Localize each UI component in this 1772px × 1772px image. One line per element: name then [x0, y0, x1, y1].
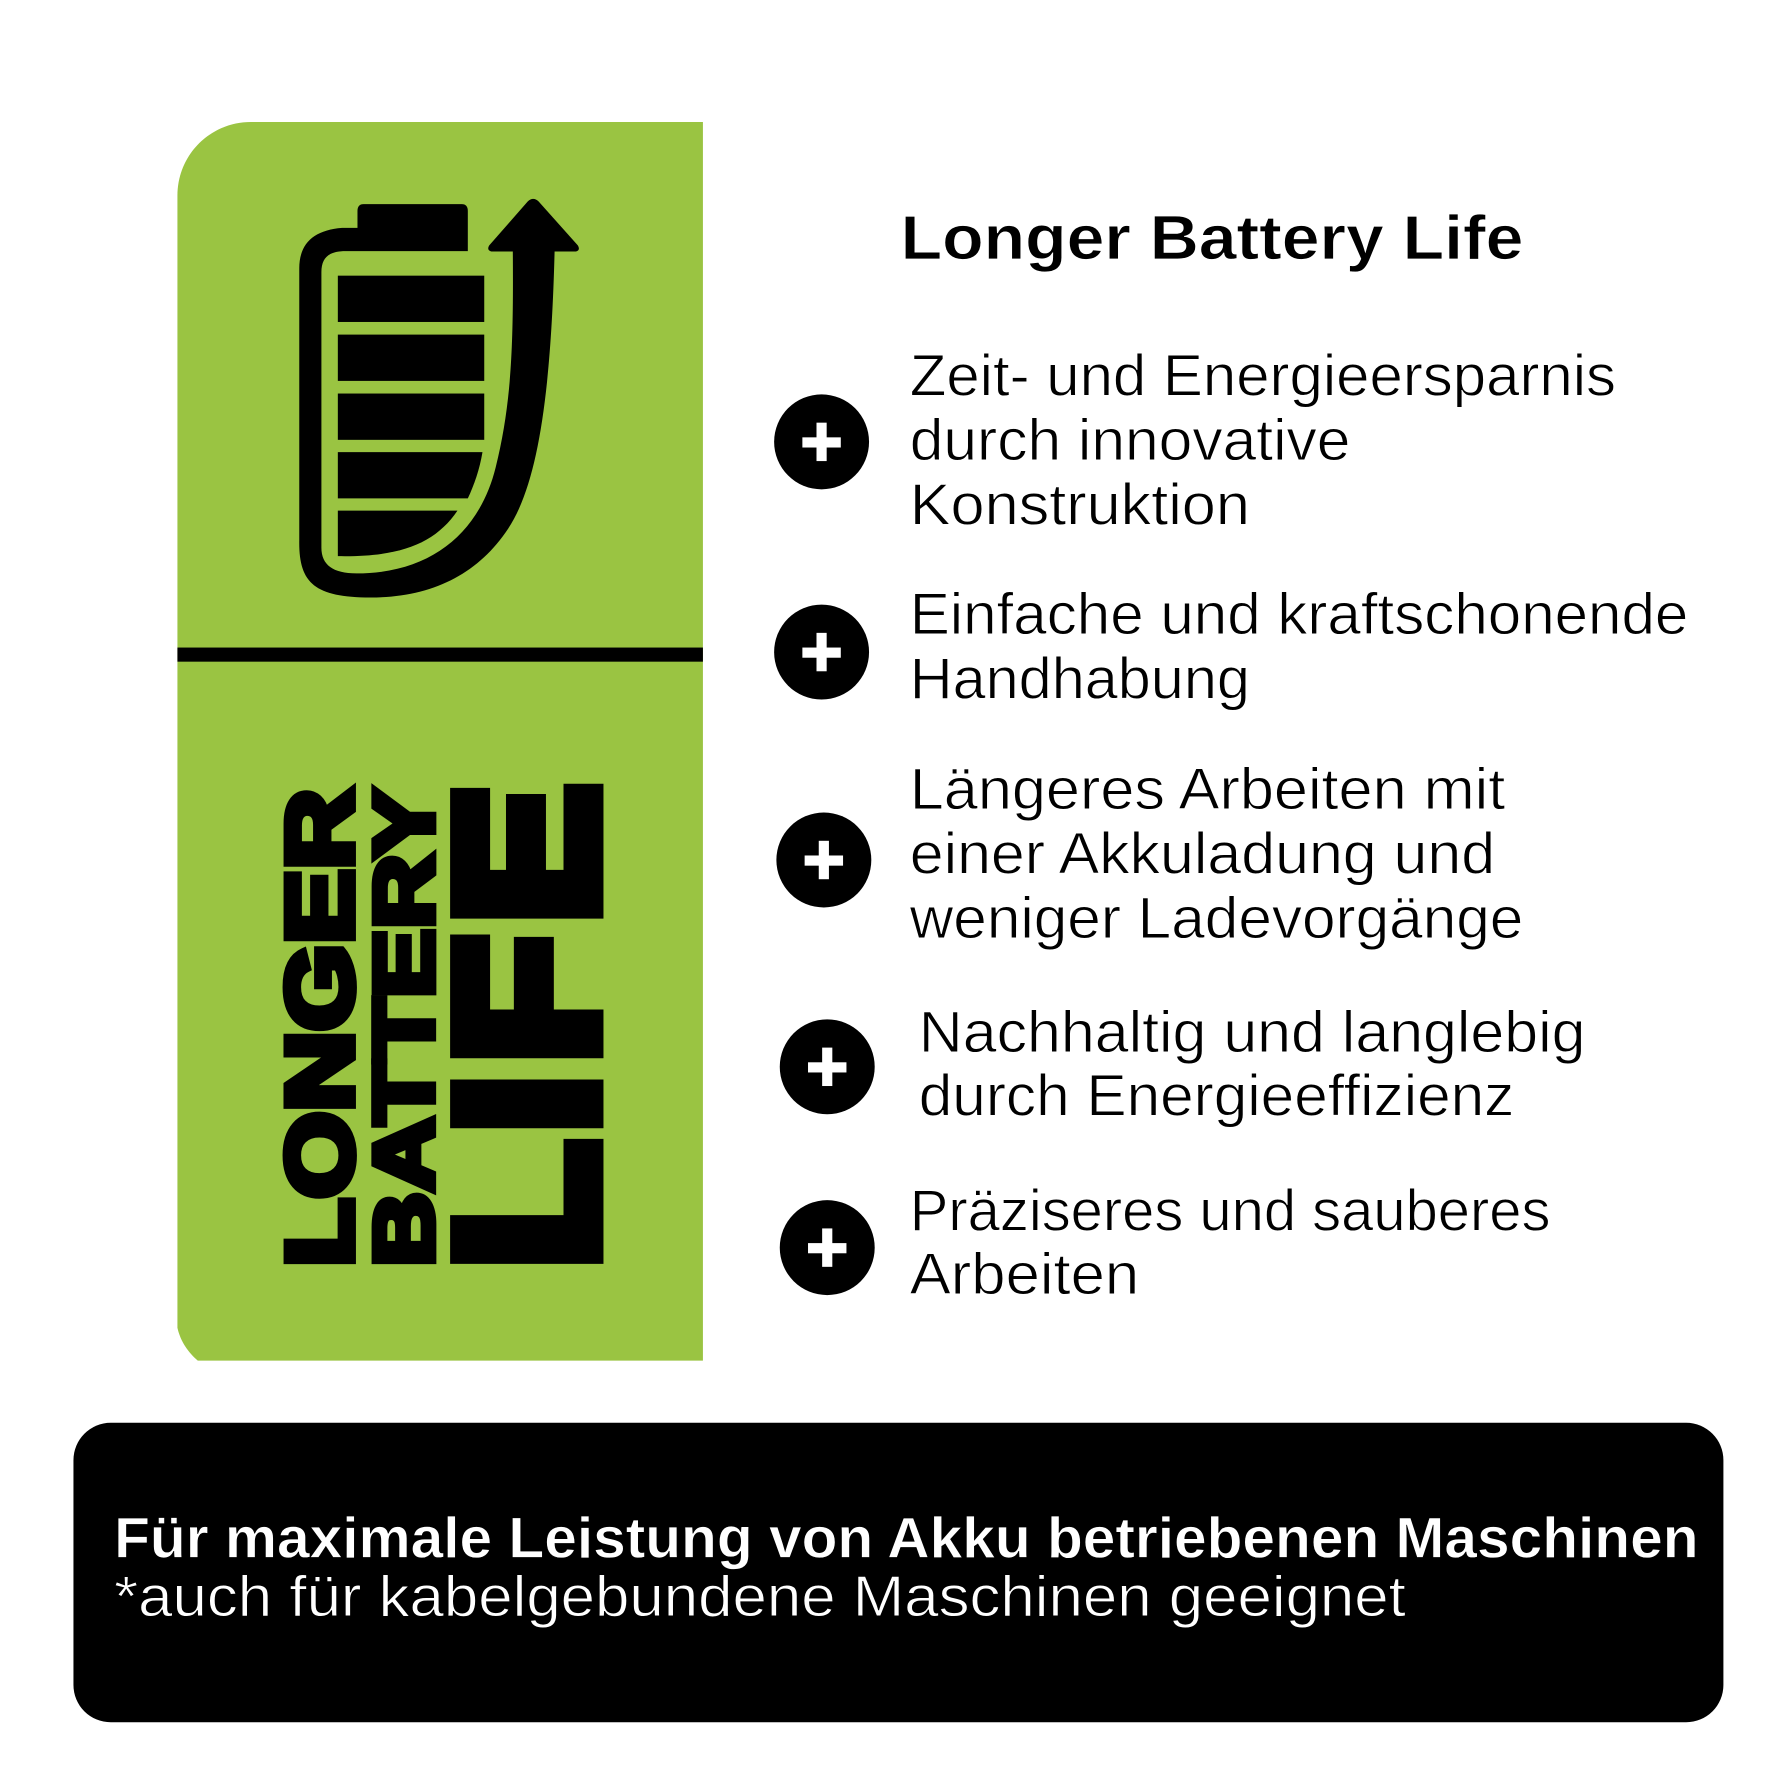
- badge wordmark: LONGER BATTERY LIFE: BATTERY: [356, 789, 451, 1267]
- benefit 1: Zeit- und Energieersparnis: [910, 344, 1616, 409]
- badge wordmark: LONGER BATTERY LIFE: [267, 785, 636, 1268]
- benefit 4: durch Energieeffizienz: [919, 1063, 1514, 1128]
- benefit 5: Arbeiten: [910, 1242, 1139, 1307]
- benefit 3: weniger Ladevorgänge: [909, 886, 1523, 951]
- heading: Longer Battery Life: [901, 204, 1523, 273]
- benefit 1: [774, 344, 1616, 537]
- icon: battery with rising arrow: [299, 199, 579, 598]
- badge wordmark: LONGER BATTERY LIFE: LONGER: [267, 789, 372, 1267]
- benefit list: [774, 344, 1688, 1307]
- footer banner: Für maximale Leistung von Akku betriebenen Maschinen: [114, 1506, 1699, 1570]
- benefit 3: [776, 757, 1523, 951]
- benefit 2: [774, 582, 1688, 711]
- benefit 1: durch innovative: [910, 408, 1350, 473]
- benefit 5: Präziseres und sauberes: [910, 1179, 1550, 1244]
- footer banner: *auch für kabelgebundene Maschinen geeignet: [114, 1565, 1406, 1629]
- benefit 4: [780, 1000, 1586, 1128]
- benefit 2: Handhabung: [910, 646, 1250, 711]
- benefit 3: einer Akkuladung und: [910, 822, 1495, 887]
- benefit 5: [780, 1179, 1550, 1307]
- benefit 1: Konstruktion: [910, 472, 1250, 537]
- benefit 4: Nachhaltig und langlebig: [919, 1000, 1586, 1065]
- benefit 3: Längeres Arbeiten mit: [910, 757, 1505, 822]
- badge wordmark: LONGER BATTERY LIFE: LIFE: [416, 785, 636, 1268]
- panel: green badge: [177, 122, 703, 1361]
- benefit 2: Einfache und kraftschonende: [910, 582, 1688, 647]
- footer banner: [73, 1423, 1723, 1722]
